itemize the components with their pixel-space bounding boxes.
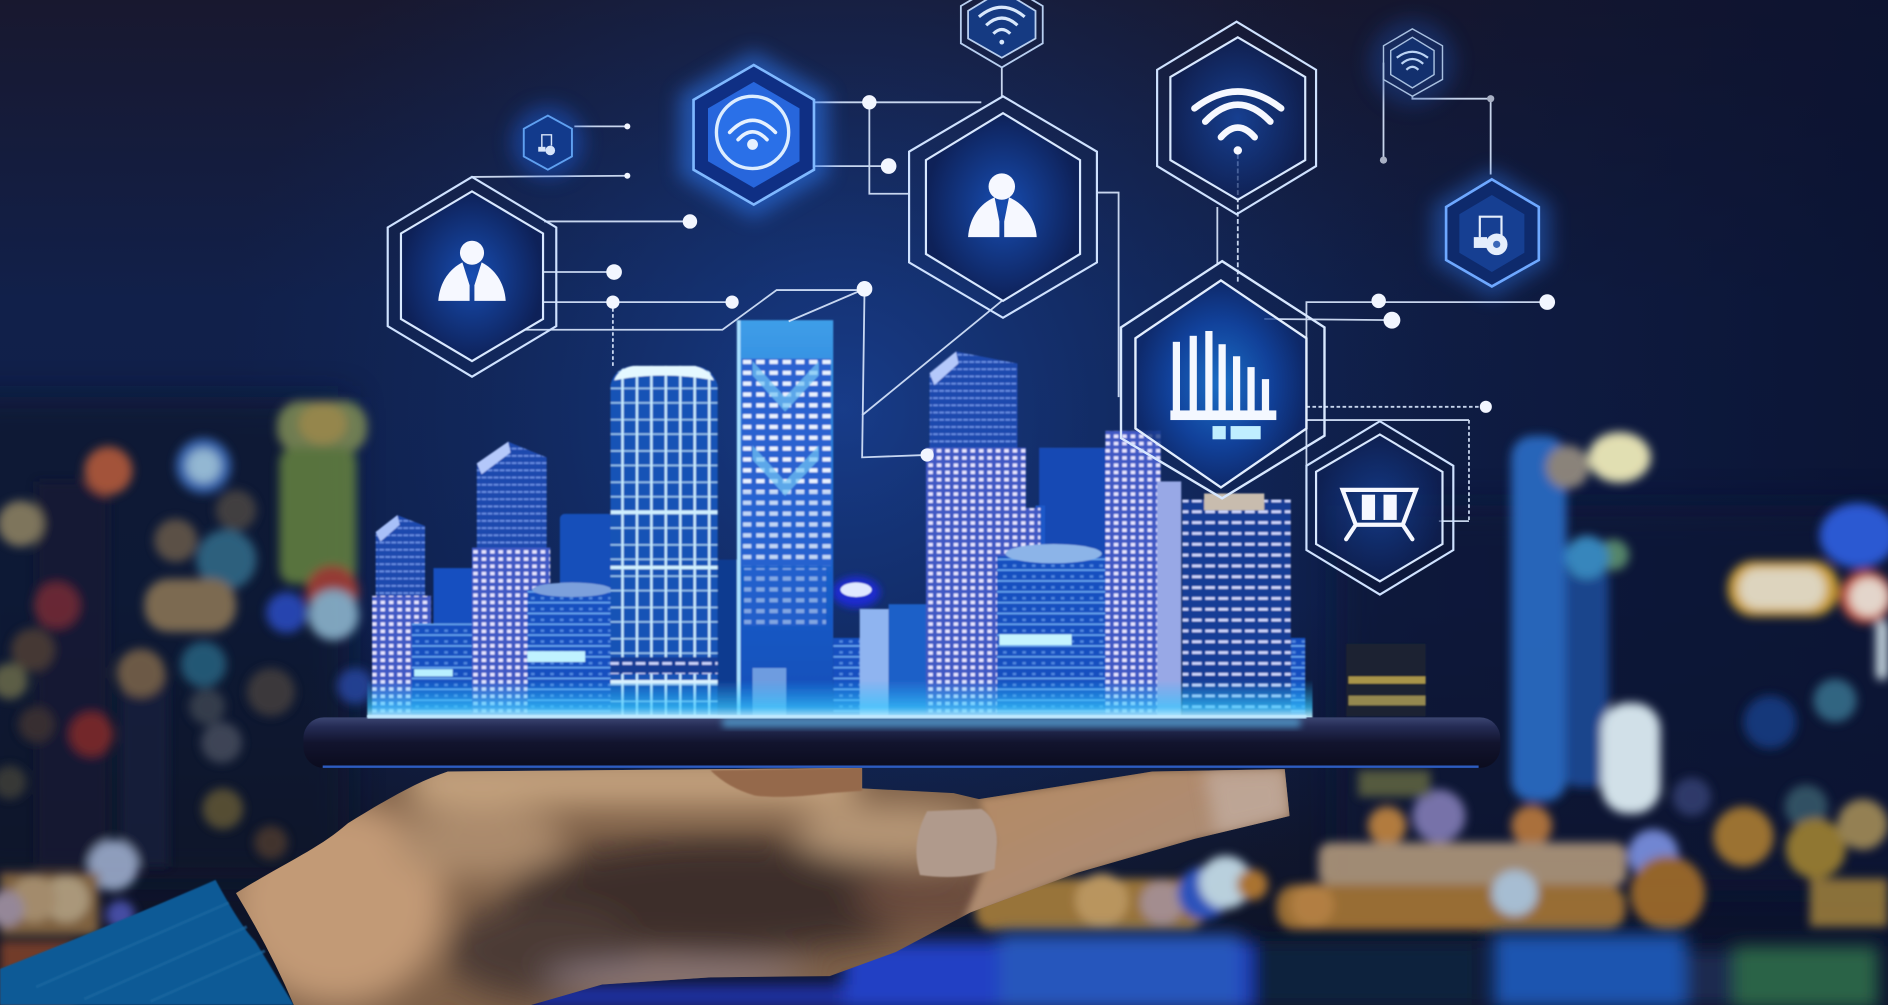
blurred city lights: right side bbox=[975, 432, 1888, 930]
icon: bars bbox=[1170, 331, 1276, 439]
hand sleeve bbox=[0, 880, 294, 1005]
tall glass tower bbox=[737, 320, 833, 716]
icon: cart bbox=[1343, 490, 1416, 539]
skyline hologram bbox=[367, 320, 1312, 719]
water reflections bbox=[530, 934, 1878, 1005]
tower A bbox=[372, 515, 431, 716]
icon: person bbox=[968, 173, 1037, 237]
hexagon: person centre bbox=[909, 96, 1097, 318]
hexagon: small wifi top right bbox=[1369, 19, 1456, 106]
towers on the right bbox=[1105, 431, 1291, 716]
palm behind thumb bbox=[710, 768, 862, 797]
hexagon: small disc icon left bbox=[512, 106, 584, 178]
hexagon: top centre wifi bbox=[961, 0, 1043, 67]
icon: wifi bbox=[730, 120, 775, 150]
small distant building bbox=[1346, 644, 1426, 716]
tower H bbox=[926, 351, 1040, 716]
hexagon: shopping cart bbox=[1306, 421, 1453, 595]
icon: disc bbox=[1474, 217, 1508, 255]
blurred city lights: left side bbox=[0, 401, 373, 1005]
icon: person bbox=[438, 241, 506, 301]
hexagon: bar chart bbox=[1121, 261, 1324, 498]
base glow on tablet bbox=[367, 680, 1312, 719]
hexagon: person left bbox=[388, 177, 556, 377]
hexagon: large wifi bbox=[1157, 22, 1316, 214]
connector lines bbox=[472, 63, 1547, 544]
tablet bbox=[303, 715, 1500, 768]
low block 1 bbox=[412, 623, 472, 716]
icon: disc bbox=[538, 135, 555, 155]
thumbnail bbox=[916, 809, 997, 877]
fingers bbox=[963, 769, 1290, 921]
low block 2 bbox=[527, 583, 612, 716]
icon: wifi bbox=[979, 7, 1025, 45]
rear buildings bbox=[433, 448, 1305, 716]
cylindrical tower bbox=[610, 366, 718, 716]
icon: wifi bbox=[1194, 91, 1281, 155]
tower B bbox=[472, 442, 550, 716]
hexagon: glowing circle wifi bbox=[679, 51, 828, 219]
icon: wifi bbox=[1397, 52, 1428, 70]
connector dots bbox=[606, 95, 1555, 462]
hexagon: music icon right bbox=[1433, 169, 1551, 298]
hand bbox=[217, 756, 1300, 1005]
low block 3 bbox=[997, 544, 1111, 716]
